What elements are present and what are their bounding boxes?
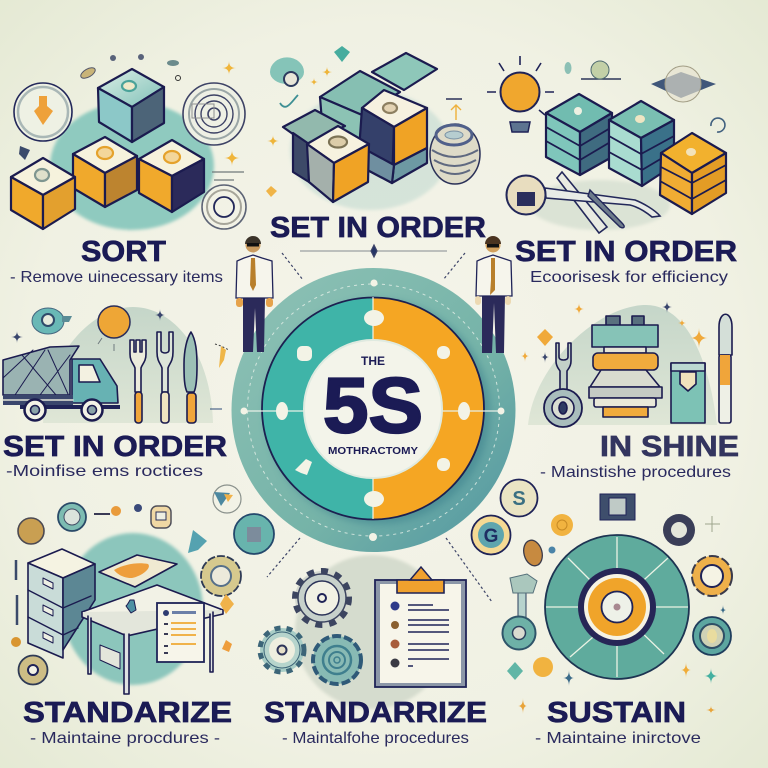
icons: surrounding badges: [472, 480, 732, 677]
text: sort description: - Remove uinecessary items: [10, 269, 223, 286]
panel: set in order top: [267, 46, 486, 244]
icon: clipboard: [375, 567, 466, 687]
icon: back flat box: [372, 53, 437, 90]
figure: right person: [475, 236, 512, 353]
panel: set in order left: [3, 306, 229, 480]
badge: partial lens: [213, 485, 241, 513]
icon: left box: [283, 110, 345, 182]
heading: sort: SORT: [81, 236, 166, 268]
icon: middle box: [320, 71, 400, 140]
icon: checklist document: [157, 603, 204, 662]
icon: orange stacked box: [660, 133, 726, 214]
icon: desk: [82, 585, 223, 694]
icon: sun: [98, 306, 130, 351]
icon: tall tool: [719, 314, 732, 423]
panel: sustain: [472, 480, 732, 747]
heading: set in order left: SET IN ORDER: [3, 431, 227, 463]
icon: light teal stacked box: [609, 101, 674, 186]
text: standardize centre description: - Maintalfohe procedures: [282, 730, 469, 747]
icon: cream orange box: [358, 90, 427, 183]
icon: teal stacked box: [546, 94, 612, 175]
wheel markers: [240, 280, 504, 541]
small decorations: [11, 309, 229, 409]
icons: surrounding badges: S: [512, 488, 526, 510]
panel: set in order right: [487, 56, 737, 286]
icon: press stack: [589, 316, 662, 417]
heading: standardize centre: STANDARRIZE: [264, 697, 487, 729]
icon: target wheel: [545, 535, 689, 679]
connector lines: [267, 245, 492, 602]
text: set in order left description: -Moinfise ems roctices: [6, 463, 203, 480]
wheel: orange half: [373, 298, 484, 520]
icon: tray: [99, 555, 177, 587]
small decorations: [507, 516, 726, 714]
icon: teal box: [98, 69, 164, 142]
centre white disc: [304, 340, 442, 478]
icon: large gear: [295, 571, 349, 625]
heading: in shine: IN SHINE: [600, 431, 739, 463]
icon: front box: [307, 126, 369, 202]
small decorations: [564, 61, 725, 132]
icon: teal key: [32, 308, 72, 334]
icon: teal bottle: [671, 363, 705, 423]
icon: filing cabinet: [28, 549, 95, 658]
outer ring: [232, 268, 516, 552]
icon: orange navy box: [139, 140, 204, 212]
wheel: teal half: [262, 298, 373, 520]
text: the: THE: [361, 354, 385, 368]
small decorations: [19, 54, 277, 197]
panel: standardize left: [11, 503, 274, 747]
panel: in shine: [521, 301, 739, 481]
icon: lower right gear: [313, 636, 361, 684]
panel: sort: [10, 54, 277, 286]
icon: striped vase: [430, 99, 480, 184]
icons: surrounding badges: [11, 503, 274, 684]
text: in shine description: - Mainstishe procedures: [540, 464, 731, 481]
heading: set in order right: SET IN ORDER: [515, 236, 737, 268]
icons: surrounding badges: G: [484, 526, 498, 547]
icon: target circle: [183, 83, 245, 145]
icon: orange box left: [11, 158, 75, 229]
icon: wrench: [544, 343, 582, 427]
panel: standardize centre: [260, 555, 487, 747]
icon: ring: [202, 185, 246, 229]
icon: orange box centre: [73, 137, 137, 207]
text: methodology: MOTHRACTOMY: [328, 446, 418, 457]
icon: spatula: [157, 332, 173, 423]
heading: set in order top: SET IN ORDER: [270, 212, 486, 244]
figure: left person: [236, 236, 273, 352]
icon: scissors: [506, 172, 660, 233]
icon: gear wrench: [502, 574, 537, 650]
text: standardize left description: - Maintaine procdures -: [30, 730, 220, 747]
icon: lower left gear: [260, 628, 304, 672]
icon: light bulb: [487, 56, 554, 132]
icon: arrow circle: [14, 83, 72, 141]
heading: standardize left: STANDARIZE: [23, 697, 232, 729]
icon: fork: [130, 340, 146, 423]
icon: knife: [184, 332, 197, 423]
small decorations: [521, 301, 708, 363]
text: sustain description: - Maintaine inirctove: [535, 730, 701, 747]
text: 5S: 5S: [323, 361, 423, 449]
icon: truck: [3, 346, 120, 420]
panel: central 5S wheel: [232, 268, 516, 552]
text: efficiency description: Ecoorisesk for efficiency: [530, 269, 728, 286]
small decorations: [267, 46, 350, 147]
heading: sustain: SUSTAIN: [547, 697, 686, 729]
